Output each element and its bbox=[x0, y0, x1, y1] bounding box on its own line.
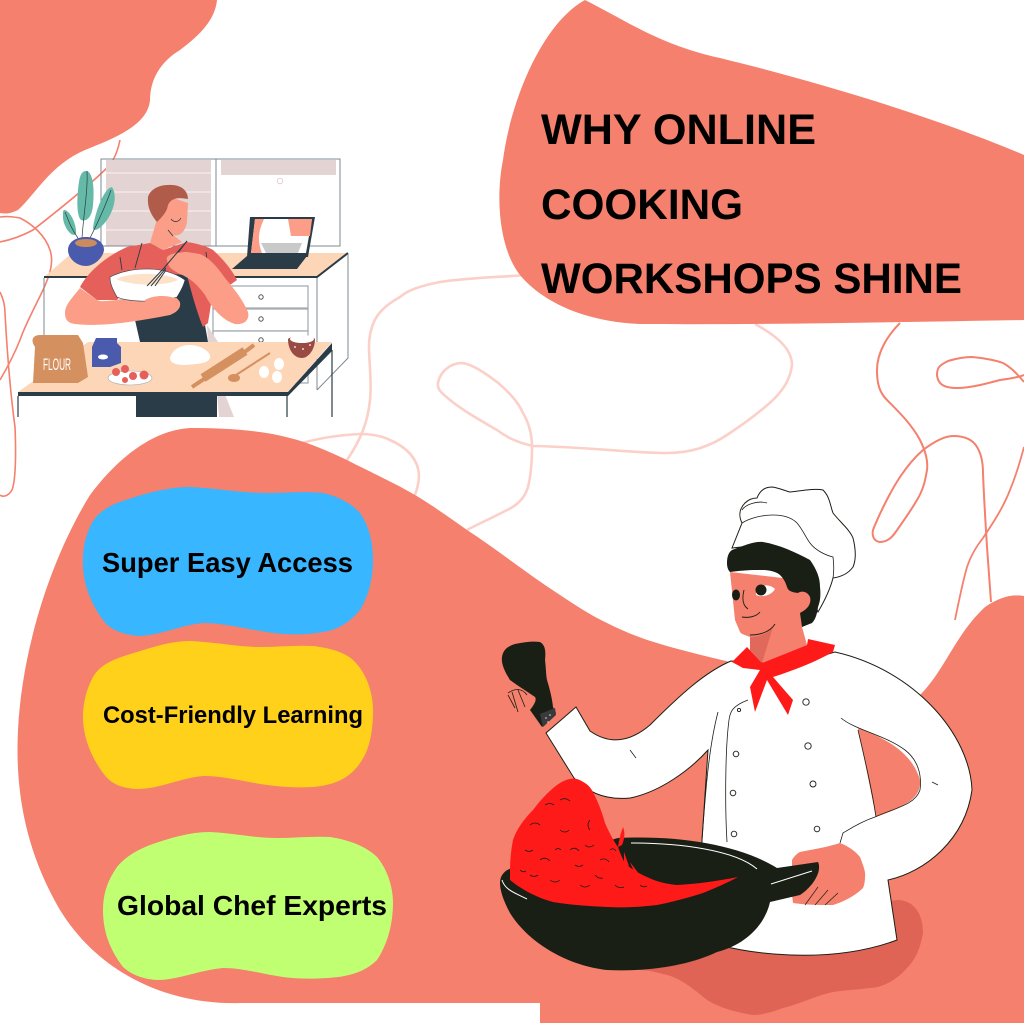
wok pan bbox=[500, 837, 819, 970]
illustration: home cook at kitchen table bbox=[18, 159, 348, 417]
pill: Global Chef Experts: Global Chef Experts bbox=[117, 890, 387, 921]
rolling pin bbox=[192, 345, 254, 387]
apron bbox=[135, 268, 208, 342]
chef hat bbox=[732, 487, 855, 612]
chef jacket bbox=[546, 652, 972, 955]
cook figure bbox=[65, 185, 248, 417]
eggs bbox=[259, 358, 284, 383]
jacket arm gap bbox=[858, 728, 920, 817]
pill: Super Easy Access: Super Easy Access bbox=[102, 547, 353, 578]
blob: main panel background bbox=[17, 428, 1024, 1023]
red food bbox=[510, 779, 738, 907]
back counter and drawers bbox=[44, 253, 348, 390]
pill: Super Easy Access bbox=[83, 487, 373, 636]
plant bbox=[63, 171, 115, 266]
red neckerchief bbox=[732, 639, 835, 715]
illustration: chef with pan bbox=[500, 487, 972, 1015]
milk carton bbox=[92, 338, 121, 367]
title bbox=[541, 106, 962, 303]
strawberries plate bbox=[108, 365, 152, 385]
spoon bbox=[236, 353, 270, 375]
window blinds bbox=[101, 159, 340, 246]
hair bbox=[148, 185, 188, 222]
shadow behind jacket bbox=[640, 900, 923, 1015]
right arm bbox=[167, 252, 248, 324]
jacket buttons bbox=[730, 699, 820, 837]
left arm bbox=[65, 288, 180, 325]
kitchen table with ingredients bbox=[18, 335, 332, 417]
laptop bbox=[232, 217, 315, 269]
blob: top left corner bbox=[0, 0, 217, 214]
pepper shaker bbox=[502, 642, 556, 727]
chef head bbox=[727, 542, 820, 663]
pill: Global Chef Experts bbox=[103, 832, 393, 980]
hand on pan handle bbox=[792, 843, 865, 905]
title: COOKING bbox=[541, 181, 743, 229]
neck and face bbox=[150, 197, 188, 250]
title: WORKSHOPS SHINE bbox=[541, 255, 962, 303]
dough bbox=[170, 345, 210, 365]
pill: Cost-Friendly Learning bbox=[83, 641, 373, 789]
background scribbles bbox=[0, 140, 1024, 620]
flour bag: FLOUR bbox=[43, 355, 71, 374]
title: WHY ONLINE bbox=[541, 106, 816, 154]
blob: title background bbox=[499, 0, 1024, 324]
flour bag bbox=[33, 335, 88, 383]
small bowl bbox=[288, 335, 315, 358]
pill: Cost-Friendly Learning: Cost-Friendly Learning bbox=[103, 702, 363, 729]
mixing bowl bbox=[110, 269, 185, 301]
red shirt bbox=[80, 242, 237, 327]
